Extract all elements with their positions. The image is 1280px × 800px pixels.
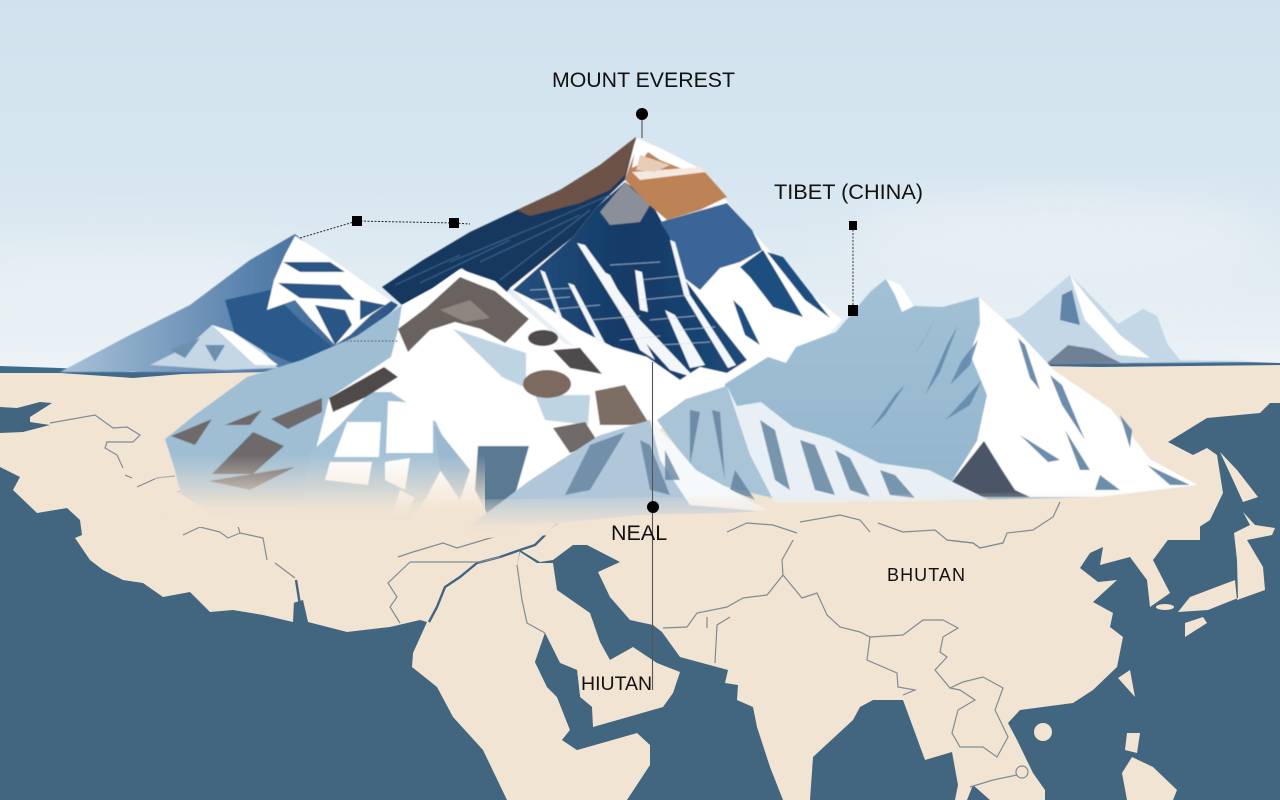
snow blocks — [325, 401, 433, 515]
rivers dark — [296, 523, 558, 622]
mountain: front low ridge — [455, 420, 770, 537]
small foreground ridge — [150, 325, 278, 370]
mountain: right distant peaks — [1004, 275, 1255, 364]
label: Bhutan: BHUTAN — [887, 565, 965, 585]
right blue face — [660, 203, 762, 290]
shadow face — [225, 290, 345, 366]
label: Neal: NEAL — [611, 521, 667, 545]
horizon sea strip — [0, 359, 1280, 378]
horizontal snow lines — [530, 262, 715, 345]
label: Hiutan: HIUTAN — [581, 673, 652, 695]
sky background — [0, 0, 1280, 372]
haze clouds — [0, 195, 1270, 350]
Red Sea — [535, 633, 637, 750]
summit rock — [398, 277, 529, 352]
mist: base of front peak — [155, 455, 485, 527]
blue shadow left side — [165, 305, 402, 525]
border restored below ridge — [727, 502, 1060, 548]
central dark face — [513, 182, 747, 380]
orange summit rock — [625, 147, 727, 220]
Japan islands — [1178, 512, 1275, 612]
northern land with India and China — [0, 365, 1280, 800]
snow face — [950, 297, 1198, 497]
sea background — [0, 372, 1280, 800]
white streaks on face — [540, 240, 736, 378]
speckled grey top of face — [600, 182, 650, 225]
dark right stripes — [733, 250, 830, 345]
dark rocks — [528, 330, 602, 374]
snow base — [510, 140, 842, 410]
left face streaks — [395, 195, 610, 285]
mountain: Everest main massif — [382, 137, 842, 410]
Hainan island — [1034, 723, 1052, 741]
streaky lower shadow — [475, 446, 529, 520]
left rocks — [171, 398, 322, 490]
mountain: second snow ridge — [657, 386, 989, 503]
brown ridge — [517, 137, 636, 216]
mountain: front rocky peak — [165, 269, 691, 525]
blue streaks — [870, 318, 982, 430]
summit snow — [886, 279, 914, 312]
mountain: right snow ridge — [720, 279, 1198, 500]
dark rock band — [329, 367, 398, 412]
summit snow — [267, 236, 391, 345]
country borders — [50, 415, 1060, 787]
land mass map — [0, 365, 1280, 800]
callout: Tibet leader — [848, 221, 858, 316]
callout: Everest marker — [636, 108, 648, 138]
label: Tibet: TIBET (CHINA) — [774, 179, 923, 204]
Taiwan and Philippines — [1118, 670, 1135, 697]
mist: base of low ridge and right ridge — [440, 490, 1200, 540]
brown rock — [523, 370, 571, 398]
dark shadow rock — [950, 441, 1030, 497]
callout: Nepal leader — [343, 341, 659, 690]
land fill below ridge — [560, 503, 1200, 540]
vertical ice streaks — [453, 329, 526, 388]
summit snow — [632, 138, 703, 172]
Sakhalin island — [1220, 452, 1258, 502]
Arabia land — [517, 552, 680, 727]
mountain: left peak — [60, 234, 398, 372]
label: Mount Everest: MOUNT EVEREST — [552, 68, 735, 92]
callout: left peak leader — [300, 216, 470, 238]
blue shadow patch — [295, 392, 450, 525]
base snow — [165, 269, 691, 525]
dark left face — [382, 137, 636, 305]
